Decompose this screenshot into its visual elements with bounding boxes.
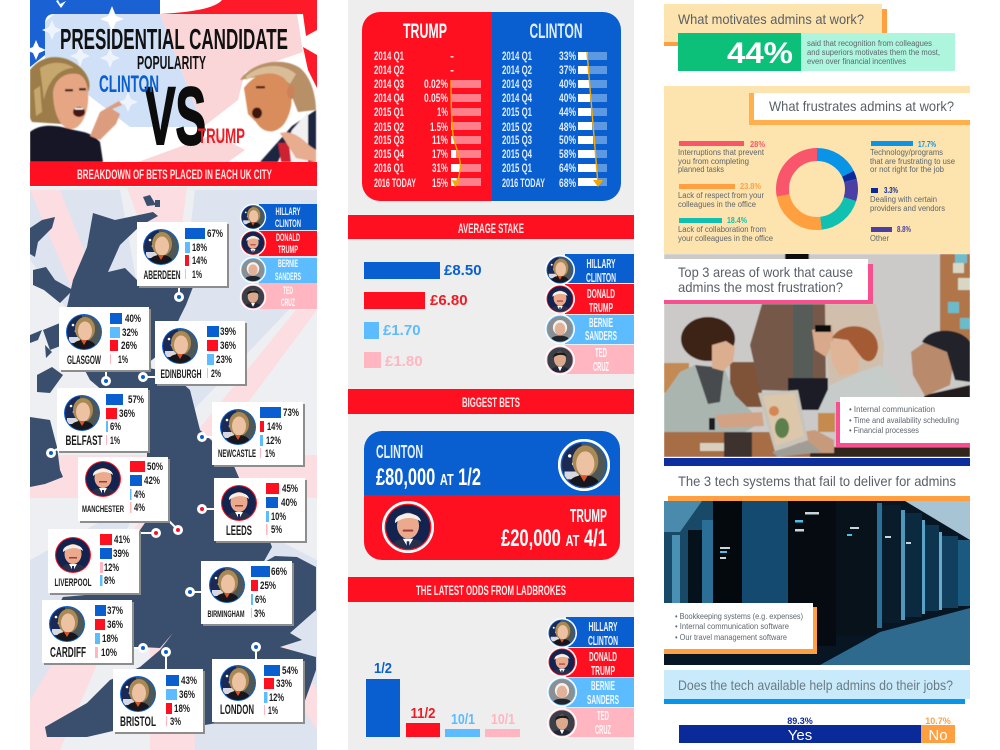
card: Liverpool xyxy=(48,529,141,595)
legend: lack of collaboration: 18.4% xyxy=(727,216,747,225)
Clinton rows: 50% xyxy=(559,135,576,147)
banner: biggest bets xyxy=(348,389,634,414)
arrow head: Clinton xyxy=(593,180,603,187)
card: Newcastle: 73% xyxy=(283,407,299,419)
connectors xyxy=(51,286,256,669)
stat description: and superiors motivates them the most, xyxy=(807,48,940,57)
caption: tech systems: • Our travel management software xyxy=(675,633,787,642)
card: Liverpool: LIVERPOOL xyxy=(54,577,92,589)
Trump rows: 2014 Q4 xyxy=(374,93,404,105)
Clinton rows: 2015 Q1 xyxy=(502,163,532,175)
divider bar: blue xyxy=(664,458,970,466)
card: Birmingham: 66% xyxy=(271,566,287,578)
legend: candidates, map: CRUZ xyxy=(281,297,295,309)
Trump bet: TRUMP xyxy=(570,506,607,526)
photo: office meeting xyxy=(664,252,970,457)
card: Bristol: BRISTOL xyxy=(120,713,156,729)
card: Leeds: LEEDS xyxy=(226,522,252,538)
Trump rows: - xyxy=(450,65,454,77)
legend: interruptions: Interruptions that prevent xyxy=(678,148,765,157)
chart: yes/no bar xyxy=(679,716,955,744)
photo: Donald Trump xyxy=(240,62,316,162)
legend: other: 8.8% xyxy=(897,225,911,234)
Trump rows: 31% xyxy=(432,163,448,175)
Trump rows: 2015 Q1 xyxy=(374,107,404,119)
panel: what frustrates admins xyxy=(664,86,970,254)
card: Birmingham: BIRMINGHAM xyxy=(208,609,244,619)
Clinton rows: 44% xyxy=(559,107,576,119)
chart: latest odds bars: 10/1 xyxy=(491,711,515,728)
legend: providers: Dealing with certain xyxy=(870,195,937,204)
chart: yes/no bar: 10.7% xyxy=(925,716,951,726)
card: Glasgow: 40% xyxy=(125,313,141,325)
legend: lack of respect: 23.8% xyxy=(740,182,761,191)
chart: average stake bars: £6.80 xyxy=(430,292,468,309)
Trump rows: 11% xyxy=(432,135,448,147)
caption: tech systems: • Internal communication software xyxy=(675,622,790,631)
card: Aberdeen xyxy=(137,222,229,288)
card: London xyxy=(212,659,305,724)
card: Edinburgh xyxy=(155,321,247,386)
banner: average stake xyxy=(348,215,634,239)
legend: lack of respect: Lack of respect from your xyxy=(678,191,764,200)
card: Newcastle xyxy=(212,402,305,467)
legend: technology xyxy=(870,140,956,174)
arrow head: Trump xyxy=(452,180,461,187)
chart: latest odds bars: 10/1 xyxy=(451,711,475,728)
donut chart xyxy=(782,154,852,224)
Trump bet xyxy=(382,501,607,553)
caption: tech systems xyxy=(664,603,817,654)
accent bar: orange xyxy=(668,496,970,501)
card: Manchester: 42% xyxy=(144,475,160,487)
card: Birmingham: 3% xyxy=(254,608,265,620)
arrow: Clinton trend xyxy=(587,52,598,184)
map: Great Britain xyxy=(45,212,316,737)
Clinton bet: CLINTON xyxy=(376,442,423,462)
stat description xyxy=(807,39,940,66)
heading: does the tech help xyxy=(664,670,970,704)
Trump rows xyxy=(374,51,481,190)
card: Glasgow: GLASGOW xyxy=(67,353,101,367)
legend: lack of respect xyxy=(678,182,764,209)
card: Birmingham xyxy=(201,561,294,626)
heading: tech systems: The 3 tech systems that fail to deliver for admins xyxy=(678,473,956,489)
legend: candidates, stake: CLINTON xyxy=(586,271,616,285)
banner: latest odds xyxy=(348,577,634,602)
Clinton rows: 33% xyxy=(559,51,576,63)
legend: other: Other xyxy=(870,234,889,243)
Trump rows: 0.05% xyxy=(424,93,448,105)
card: Leeds: 45% xyxy=(282,483,298,495)
legend: candidates, stake xyxy=(545,254,634,375)
legend: candidates, stake: CRUZ xyxy=(593,360,609,374)
Trump rows: - xyxy=(450,51,454,63)
legend: technology: or not right for the job xyxy=(870,165,945,174)
heading: does the tech help: Does the tech available help admins do their jobs? xyxy=(678,677,953,693)
heading: Trump: TRUMP xyxy=(403,20,447,43)
Trump bet: £20,000 AT 4/1 xyxy=(501,525,607,552)
card: Leeds xyxy=(214,478,307,543)
heading card: top 3 areas xyxy=(664,259,873,304)
legend: candidates, map: TED xyxy=(283,285,293,297)
card: Aberdeen: 18% xyxy=(192,242,207,254)
legend: interruptions xyxy=(678,140,765,174)
card: Manchester xyxy=(78,457,170,523)
card: Glasgow: 1% xyxy=(118,354,128,366)
card: Newcastle: 1% xyxy=(265,448,275,460)
legend: technology: that are frustrating to use xyxy=(870,157,956,166)
legend: candidates, stake: TED xyxy=(595,346,607,360)
flag background xyxy=(26,0,317,162)
panel: UK map xyxy=(30,187,317,750)
legend: interruptions: planned tasks xyxy=(678,165,724,174)
subtitle: POPULARITY xyxy=(137,53,206,73)
legend: providers: providers and vendors xyxy=(870,204,945,213)
legend: technology: 17.7% xyxy=(918,140,936,149)
legend: interruptions: you from completing xyxy=(678,157,749,166)
Trump rows: 1% xyxy=(437,107,448,119)
Trump rows: 2016 TODAY xyxy=(374,178,416,190)
map: islands xyxy=(30,195,160,393)
arrow: Trump trend xyxy=(451,80,460,184)
Clinton rows: 37% xyxy=(559,65,576,77)
Trump rows: 2015 Q2 xyxy=(374,122,404,134)
Clinton rows: 64% xyxy=(559,163,576,175)
legend: candidates, odds: CRUZ xyxy=(595,723,611,737)
legend: candidates, odds: TED xyxy=(597,709,609,723)
card: Belfast: BELFAST xyxy=(66,432,103,448)
card: Aberdeen: 67% xyxy=(207,228,223,240)
legend: candidates, map: DONALD xyxy=(276,232,300,244)
legend: technology: Technology/programs xyxy=(870,148,943,157)
legend: candidates, odds: CLINTON xyxy=(588,634,618,648)
chart: latest odds bars: 11/2 xyxy=(410,705,436,722)
card: London: LONDON xyxy=(220,701,254,717)
Clinton rows: 2014 Q2 xyxy=(502,65,532,77)
legend: candidates, stake: TRUMP xyxy=(589,301,613,315)
card: Edinburgh: 36% xyxy=(220,340,236,352)
caption: top 3 areas xyxy=(836,397,970,447)
stat description: even over financial incentives xyxy=(807,57,906,66)
card: Aberdeen: 1% xyxy=(192,269,202,281)
card: Edinburgh: 23% xyxy=(216,354,232,366)
Clinton rows: 40% xyxy=(559,93,576,105)
title: PRESIDENTIAL CANDIDATE xyxy=(60,24,288,56)
Trump rows: 15% xyxy=(432,178,448,190)
Clinton rows: 2015 Q2 xyxy=(502,122,532,134)
Clinton rows: 2015 Q1 xyxy=(502,107,532,119)
legend: interruptions: 28% xyxy=(750,140,765,149)
card: Edinburgh: 2% xyxy=(211,368,221,380)
card: Manchester: MANCHESTER xyxy=(82,504,124,515)
legend: providers xyxy=(870,186,945,213)
banner: latest odds: THE LATEST ODDS FROM LADBROKES xyxy=(416,582,566,598)
card: Bristol: 43% xyxy=(181,675,197,687)
chart: latest odds bars xyxy=(366,660,520,737)
chart: latest odds bars: 1/2 xyxy=(374,660,392,677)
card: Belfast: 36% xyxy=(119,408,135,420)
chart: average stake bars: £1.70 xyxy=(383,322,421,339)
card: Newcastle: 12% xyxy=(266,435,281,447)
Clinton rows: 2014 Q3 xyxy=(502,79,532,91)
Trump rows: 2016 Q1 xyxy=(374,163,404,175)
Clinton bet xyxy=(376,439,610,491)
card: Manchester: 4% xyxy=(134,489,145,501)
card: Newcastle: NEWCASTLE xyxy=(218,448,256,460)
Trump rows: 2015 Q3 xyxy=(374,135,404,147)
photo: Hillary Clinton xyxy=(30,57,122,162)
legend: candidates, odds xyxy=(547,617,634,738)
Clinton rows: 48% xyxy=(559,122,576,134)
Clinton rows: 2014 Q4 xyxy=(502,93,532,105)
Trump rows: 2014 Q1 xyxy=(374,51,404,63)
label: Clinton: CLINTON xyxy=(99,71,159,98)
card: Birmingham: 6% xyxy=(255,594,266,606)
card: London: 1% xyxy=(268,705,278,717)
Trump rows: 0.02% xyxy=(424,79,448,91)
card: Cardiff: 10% xyxy=(101,647,117,659)
card: Leeds: 5% xyxy=(271,524,282,536)
Clinton rows xyxy=(502,51,607,190)
card: Liverpool: 41% xyxy=(114,534,130,546)
heading: What frustrates admins at work? xyxy=(769,98,954,114)
legend: candidates, map xyxy=(240,204,317,310)
caption: top 3 areas: • Internal communication xyxy=(849,405,935,414)
chart: average stake bars: £8.50 xyxy=(444,262,482,279)
Clinton bet: £80,000 AT 1/2 xyxy=(376,464,481,491)
card: Leeds: 40% xyxy=(281,497,297,509)
card: Newcastle: 14% xyxy=(267,421,282,433)
card: Liverpool: 8% xyxy=(104,575,115,587)
legend: lack of respect: colleagues in the office xyxy=(678,200,757,209)
chart: yes/no bar: 89.3% xyxy=(787,716,813,726)
banner: average stake: AVERAGE STAKE xyxy=(458,220,524,236)
card: London: 54% xyxy=(282,665,298,677)
Clinton rows: 2016 TODAY xyxy=(502,178,545,190)
legend: candidates, odds: DONALD xyxy=(589,650,617,664)
Trump rows: 2014 Q3 xyxy=(374,79,404,91)
photo: server room xyxy=(664,501,970,665)
legend: other xyxy=(870,225,911,243)
legend: candidates, odds: HILLARY xyxy=(588,620,618,634)
banner: biggest bets: BIGGEST BETS xyxy=(462,394,520,410)
legend: candidates, map: BERNIE xyxy=(278,258,298,270)
heading: Clinton: CLINTON xyxy=(530,20,582,43)
legend: candidates, stake: BERNIE xyxy=(589,316,613,330)
legend: candidates, stake: HILLARY xyxy=(586,257,616,271)
banner: breakdown: BREAKDOWN OF BETS PLACED IN EACH UK CITY xyxy=(77,167,272,182)
Clinton rows: 40% xyxy=(559,79,576,91)
Trump rows: 2015 Q4 xyxy=(374,149,404,161)
panel: Trump vs Clinton quarterly odds xyxy=(362,12,621,201)
card: London: 33% xyxy=(276,678,292,690)
map dots xyxy=(46,292,261,657)
heading card: top 3 areas: admins the most frustration? xyxy=(678,279,843,295)
legend: candidates, stake: DONALD xyxy=(587,287,615,301)
legend: lack of collaboration xyxy=(678,216,774,243)
card: Edinburgh: EDINBURGH xyxy=(160,367,201,381)
panel: biggest bets xyxy=(364,431,620,560)
caption: tech systems: • Bookkeeping systems (e.g. expenses) xyxy=(675,612,803,621)
heading card: top 3 areas: Top 3 areas of work that cause xyxy=(678,264,853,280)
card: Birmingham: 25% xyxy=(260,580,276,592)
card: Manchester: 50% xyxy=(147,461,163,473)
label: VS: VS xyxy=(145,71,206,162)
card: Belfast xyxy=(57,388,150,453)
chart: yes/no bar: No xyxy=(928,727,948,744)
legend: candidates, map: SANDERS xyxy=(275,271,301,283)
card: Bristol: 18% xyxy=(174,703,190,715)
column background xyxy=(348,0,634,750)
Clinton rows: 2014 Q1 xyxy=(502,51,532,63)
card: Edinburgh: 39% xyxy=(220,326,236,338)
stat: 44%: 44% xyxy=(727,37,793,70)
chart: yes/no bar: Yes xyxy=(788,727,812,744)
card: Bristol: 3% xyxy=(170,716,181,728)
Trump rows: 2014 Q2 xyxy=(374,65,404,77)
legend: candidates, stake: SANDERS xyxy=(585,329,617,343)
legend: lack of collaboration: your colleagues in the office xyxy=(678,234,774,243)
card: Manchester: 4% xyxy=(134,502,145,514)
legend: candidates, map: CLINTON xyxy=(275,218,301,230)
panel: what motivates admins xyxy=(664,4,955,71)
stat description: said that recognition from colleagues xyxy=(807,39,932,48)
panel: header xyxy=(26,0,317,750)
card: Belfast: 1% xyxy=(110,435,120,447)
Trump rows: 1.5% xyxy=(430,122,448,134)
Clinton rows: 2015 Q4 xyxy=(502,149,532,161)
card: Belfast: 6% xyxy=(110,421,121,433)
card: Aberdeen: ABERDEEN xyxy=(144,268,180,282)
card: Glasgow: 32% xyxy=(122,327,138,339)
legend: lack of collaboration: Lack of collaboration from xyxy=(678,225,766,234)
legend: providers: 3.3% xyxy=(884,186,898,195)
legend: candidates, odds: TRUMP xyxy=(591,664,615,678)
card: Bristol xyxy=(113,669,205,734)
card: Bristol: 36% xyxy=(179,689,195,701)
label: Trump: TRUMP xyxy=(198,125,245,148)
Clinton rows: 68% xyxy=(559,178,576,190)
card: Aberdeen: 14% xyxy=(192,255,207,267)
card: Cardiff: 18% xyxy=(102,633,118,645)
card: London: 12% xyxy=(269,692,284,704)
banner: breakdown xyxy=(30,162,317,186)
card: Cardiff: CARDIFF xyxy=(50,644,86,661)
heading: What motivates admins at work? xyxy=(678,11,864,27)
Clinton rows: 58% xyxy=(559,149,576,161)
card: Leeds: 10% xyxy=(271,511,286,523)
legend: candidates, map: TRUMP xyxy=(278,244,298,256)
card: Glasgow xyxy=(59,307,151,372)
card: Cardiff xyxy=(42,600,134,665)
card: Cardiff: 37% xyxy=(107,605,123,617)
Clinton rows: 2015 Q3 xyxy=(502,135,532,147)
legend: candidates, odds: SANDERS xyxy=(587,693,619,707)
caption: top 3 areas: • Time and availability scheduling xyxy=(849,416,959,425)
card: Belfast: 57% xyxy=(128,394,144,406)
card: Glasgow: 26% xyxy=(121,340,137,352)
legend: candidates, odds: BERNIE xyxy=(591,679,615,693)
chart: average stake bars xyxy=(364,262,482,370)
card: Liverpool: 39% xyxy=(113,548,129,560)
map: Ireland xyxy=(30,417,63,487)
card: Cardiff: 36% xyxy=(107,619,123,631)
Trump rows: 17% xyxy=(432,149,448,161)
chart: average stake bars: £1.80 xyxy=(385,353,423,370)
card: Liverpool: 12% xyxy=(104,562,119,574)
caption: top 3 areas: • Financial processes xyxy=(849,426,919,435)
legend: candidates, map: HILLARY xyxy=(276,206,301,218)
